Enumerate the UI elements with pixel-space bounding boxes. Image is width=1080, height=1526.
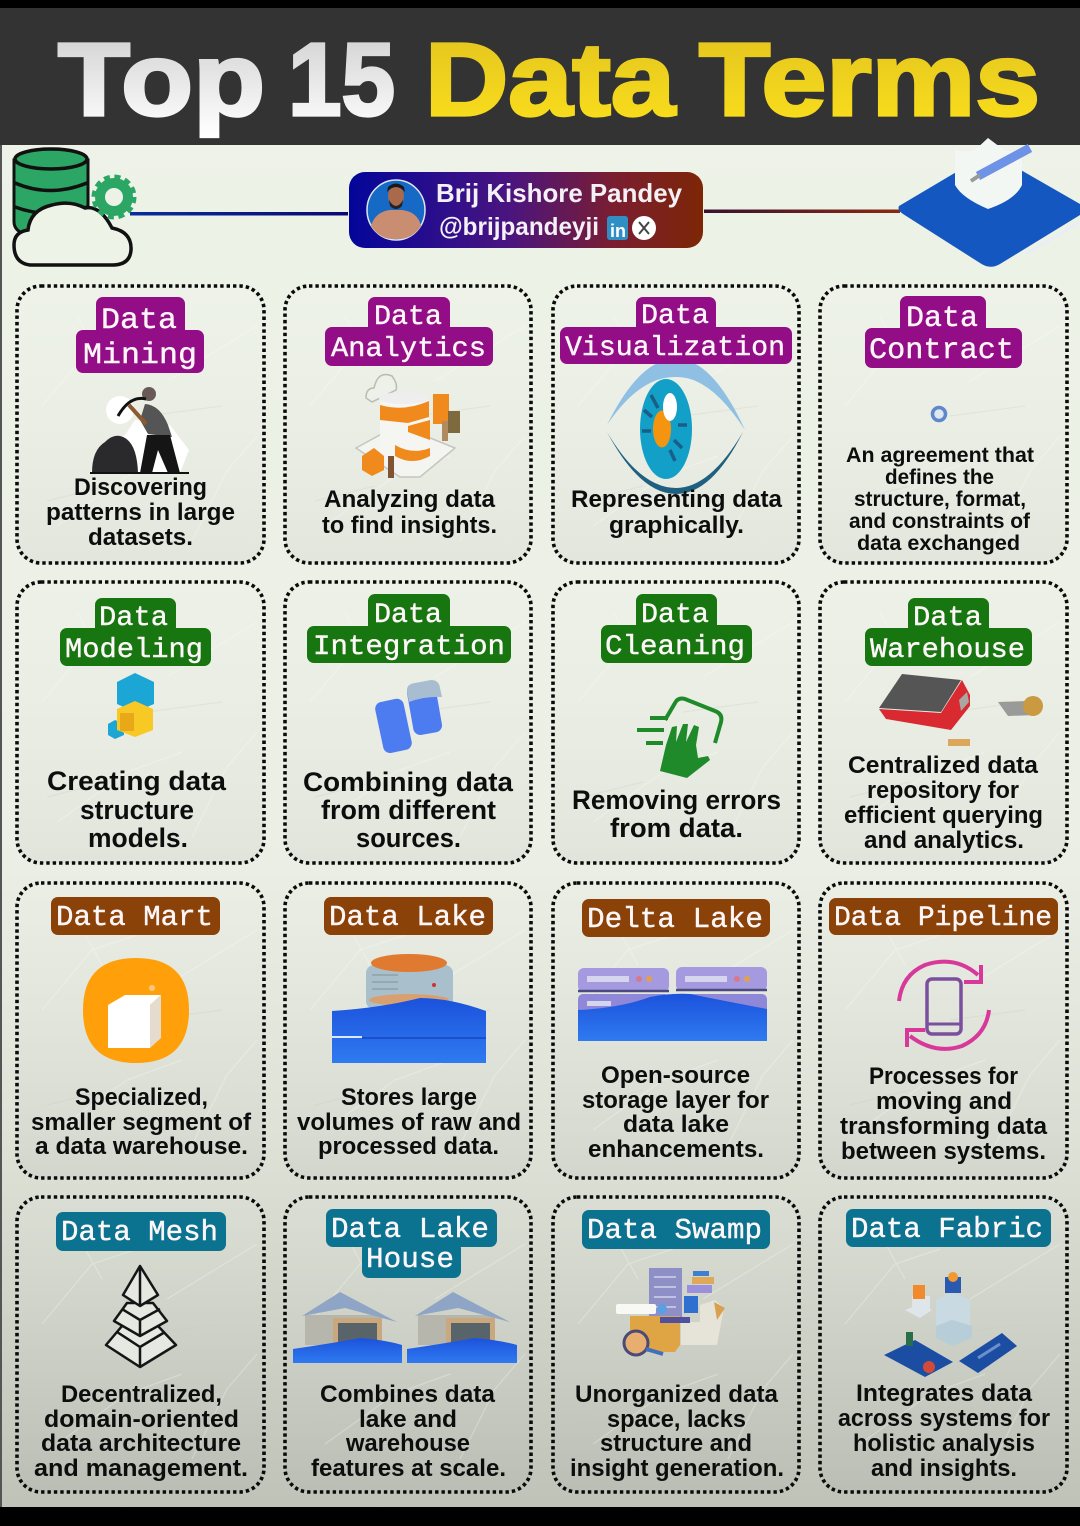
description: Data Mart: a data warehouse. — [35, 1133, 248, 1160]
label: Data Cleaning: Data — [641, 600, 709, 631]
description: Data Fabric: and insights. — [871, 1455, 1017, 1482]
panel: Delta Lake — [553, 883, 799, 1178]
panel: Data Lake House — [285, 1197, 531, 1492]
description: Data Modeling — [47, 766, 227, 853]
description: Data Analytics — [322, 486, 497, 539]
icon: orange cube tile — [83, 958, 189, 1063]
panel: Data Pipeline — [820, 883, 1067, 1178]
description: Data Mining — [46, 474, 235, 551]
description: Data Lake: volumes of raw and — [297, 1109, 521, 1136]
description: Data Mesh: domain-oriented — [44, 1406, 239, 1433]
title: Terms — [699, 22, 1040, 137]
label: Data Swamp: Data Swamp — [587, 1214, 762, 1247]
icon: miner — [90, 387, 189, 474]
label: Data Lake House: House — [366, 1243, 454, 1276]
panel: Data Mining — [17, 286, 264, 563]
description: Data Integration: from different — [321, 795, 496, 825]
label: Data Mining — [76, 297, 204, 373]
description: Data Mart — [31, 1084, 252, 1160]
author badge — [349, 172, 703, 248]
connector line right — [704, 210, 900, 213]
description: Data Lake House: features at scale. — [311, 1455, 506, 1482]
description: Data Swamp: insight generation. — [570, 1455, 784, 1482]
label: Data Contract: Data — [906, 302, 978, 336]
label: Data Mesh: Data Mesh — [61, 1216, 218, 1249]
panel: Data Mesh — [17, 1197, 264, 1492]
description: Data Analytics: Analyzing data — [324, 486, 496, 513]
icon: hand wiping — [637, 698, 721, 778]
author name: Brij Kishore Pandey — [436, 178, 683, 208]
description: Data Modeling: Creating data — [47, 766, 227, 796]
title: Top — [58, 22, 265, 137]
description: Data Visualization — [571, 486, 783, 539]
description: Data Modeling: structure — [80, 795, 194, 825]
icon: x — [632, 216, 656, 240]
description: Delta Lake: storage layer for — [582, 1087, 769, 1114]
label: Data Mining: Mining — [83, 339, 197, 373]
author avatar — [367, 180, 425, 240]
description: Data Contract: structure, format, — [854, 488, 1026, 511]
description: Data Pipeline — [840, 1063, 1048, 1165]
description: Data Warehouse: efficient querying — [844, 802, 1043, 829]
description: Data Swamp — [570, 1381, 784, 1482]
description: Data Contract: defines the — [885, 466, 994, 489]
description: Data Integration — [303, 767, 514, 853]
panel: Data Lake — [285, 883, 531, 1178]
connector line left — [130, 212, 348, 216]
label: Data Analytics — [325, 297, 493, 366]
description: Data Cleaning — [572, 785, 781, 843]
panel: Data Swamp — [553, 1197, 799, 1492]
description: Data Pipeline: moving and — [876, 1088, 1012, 1115]
description: Data Fabric — [838, 1380, 1050, 1482]
panel: Data Fabric — [820, 1197, 1067, 1492]
panel: Data Cleaning — [553, 582, 799, 863]
description: Data Visualization: graphically. — [609, 512, 744, 539]
description: Data Pipeline: between systems. — [841, 1138, 1046, 1165]
icon: linkedin — [607, 216, 628, 241]
panel: Data Warehouse — [820, 582, 1067, 863]
description: Data Swamp: Unorganized data — [575, 1381, 779, 1408]
description: Delta Lake: enhancements. — [588, 1136, 764, 1163]
description: Data Swamp: space, lacks — [607, 1406, 746, 1433]
description: Data Mining: datasets. — [88, 524, 193, 551]
title: 15 — [288, 22, 395, 137]
description: Data Warehouse: and analytics. — [864, 827, 1024, 854]
label: Data Warehouse: Warehouse — [870, 635, 1025, 666]
description: Data Mesh: Decentralized, — [61, 1381, 222, 1408]
icon: documents and magnifier — [616, 1268, 725, 1355]
panel: Data Modeling — [17, 582, 264, 863]
label: Delta Lake: Delta Lake — [587, 903, 763, 936]
label: Data Modeling: Modeling — [65, 635, 203, 666]
description: Data Cleaning: from data. — [610, 813, 743, 843]
label: Data Lake House: Data Lake — [331, 1213, 489, 1246]
description: Data Visualization: Representing data — [571, 486, 783, 513]
description: Data Pipeline: transforming data — [840, 1113, 1048, 1140]
description: Data Integration: Combining data — [303, 767, 514, 797]
description: Delta Lake: Open-source — [601, 1062, 750, 1089]
description: Delta Lake: data lake — [623, 1111, 729, 1138]
description: Data Lake House: warehouse — [345, 1430, 470, 1457]
description: Data Warehouse: Centralized data — [848, 752, 1039, 779]
icon: stacked cubes — [108, 673, 154, 739]
panel: Data Integration — [285, 582, 531, 863]
description: Data Lake: processed data. — [318, 1133, 499, 1160]
label: Data Integration: Integration — [313, 632, 505, 663]
description: Data Mining: patterns in large — [46, 499, 235, 526]
description: Data Lake House: lake and — [359, 1406, 457, 1433]
description: Data Contract: data exchanged — [857, 532, 1020, 555]
label: Data Modeling — [60, 598, 211, 666]
description: Data Swamp: structure and — [600, 1430, 752, 1457]
label: Data Integration — [307, 594, 511, 663]
description: Data Fabric: holistic analysis — [853, 1430, 1035, 1457]
description: Data Mesh — [34, 1381, 248, 1482]
description: Data Warehouse: repository for — [867, 777, 1019, 804]
label: Data Visualization: Data — [641, 301, 709, 332]
description: Data Lake: Stores large — [341, 1084, 477, 1111]
description: Data Analytics: to find insights. — [322, 512, 497, 539]
icon: isometric platforms — [884, 1272, 1017, 1377]
label: Data Visualization — [560, 297, 792, 364]
description: Data Lake House — [311, 1381, 506, 1482]
label: Data Cleaning: Cleaning — [605, 632, 745, 663]
label: Data Warehouse: Data — [913, 603, 982, 634]
icon: database cloud and gear — [14, 149, 134, 265]
description: Data Mesh: and management. — [34, 1455, 248, 1482]
label: Data Cleaning — [601, 594, 752, 663]
panel: Data Mart — [17, 883, 264, 1178]
description: Data Lake House: Combines data — [320, 1381, 496, 1408]
label: Data Contract — [865, 296, 1022, 368]
description: Data Warehouse — [844, 752, 1043, 854]
icon: servers in water — [578, 967, 767, 1041]
panel: Data Analytics — [285, 286, 531, 563]
icon: phone with cycle arrows — [899, 962, 989, 1049]
label: Data Mining: Data — [101, 304, 177, 338]
description: Data Contract: and constraints of — [849, 510, 1031, 533]
description: Delta Lake — [582, 1062, 769, 1163]
label: Data Warehouse — [865, 598, 1032, 666]
icon: linkedin: in — [610, 221, 626, 241]
description: Data Mining: Discovering — [74, 474, 207, 501]
author handle: @brijpandeyji — [439, 213, 599, 241]
label: Data Mart: Data Mart — [56, 901, 213, 934]
icon: server in water — [332, 954, 486, 1063]
description: Data Pipeline: Processes for — [869, 1063, 1018, 1090]
description: Data Cleaning: Removing errors — [572, 785, 781, 815]
description: Data Lake — [297, 1084, 521, 1160]
icon: layered pyramid — [106, 1266, 176, 1367]
title: Data — [425, 22, 676, 137]
label: Data Analytics: Analytics — [331, 334, 486, 365]
description: Data Mart: smaller segment of — [31, 1109, 252, 1136]
label: Data Fabric: Data Fabric — [851, 1213, 1043, 1246]
label: Data Contract: Contract — [869, 334, 1014, 368]
icon: eye — [607, 359, 745, 494]
description: Data Contract — [846, 444, 1034, 555]
icon: joined blocks — [374, 680, 443, 754]
description: Data Integration: sources. — [356, 823, 461, 853]
icon: blue book with shield and pen — [898, 138, 1080, 267]
label: Data Modeling: Data — [99, 603, 168, 634]
description: Data Contract: An agreement that — [846, 444, 1034, 467]
description: Data Fabric: Integrates data — [856, 1380, 1033, 1407]
icon: red warehouse — [879, 674, 1043, 746]
label: Data Lake House — [326, 1209, 497, 1278]
icon: lakehouses in water — [293, 1292, 517, 1363]
title — [58, 22, 1040, 137]
label: Data Visualization: Visualization — [565, 333, 785, 364]
label: Data Analytics: Data — [374, 302, 442, 333]
description: Data Modeling: models. — [88, 823, 188, 853]
header band — [0, 8, 1080, 145]
label: Data Integration: Data — [374, 600, 442, 631]
label: Data Lake: Data Lake — [329, 901, 486, 934]
panel: Data Visualization — [553, 286, 799, 563]
panel: Data Contract — [820, 286, 1067, 563]
description: Data Fabric: across systems for — [838, 1405, 1050, 1432]
icon: small ring — [932, 408, 946, 420]
description: Data Mart: Specialized, — [75, 1084, 208, 1111]
label: Data Pipeline: Data Pipeline — [834, 903, 1052, 934]
icon: analytics isometric chart — [356, 374, 460, 478]
description: Data Mesh: data architecture — [41, 1430, 241, 1457]
